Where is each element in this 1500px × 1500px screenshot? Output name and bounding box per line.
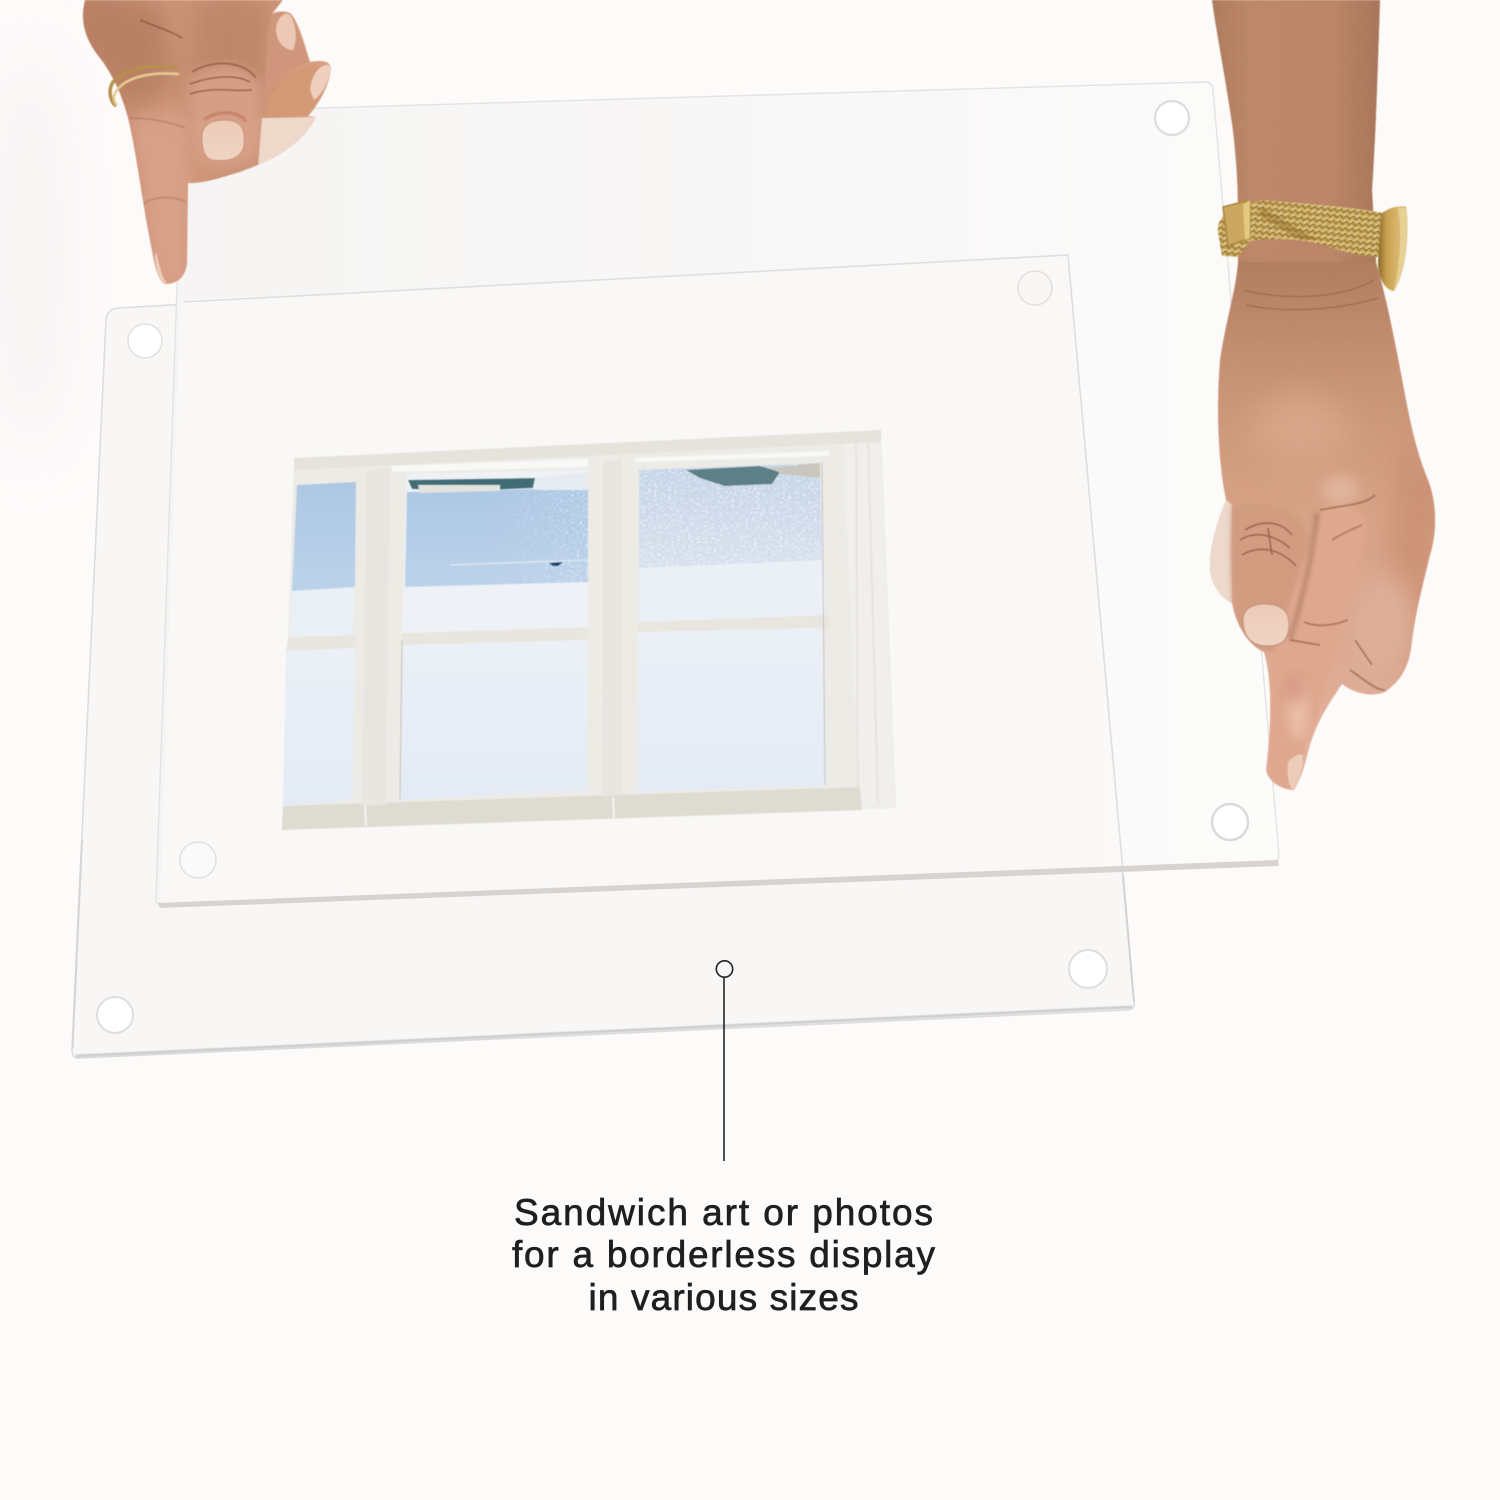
watch: gold mesh band xyxy=(1218,200,1407,291)
callout: marker and leader line xyxy=(716,961,733,1161)
pane: right bottom xyxy=(638,628,825,792)
panel holes: front xyxy=(180,101,1248,878)
thumb knuckle wrinkles xyxy=(1240,523,1296,566)
pane: right top xyxy=(639,463,825,622)
finger creases xyxy=(130,118,186,205)
mullions xyxy=(362,468,390,806)
sill xyxy=(282,787,862,830)
thumb xyxy=(1230,503,1310,651)
front panel bottom edge xyxy=(158,860,1279,908)
fingernails xyxy=(155,14,331,283)
shadow between thumb and finger xyxy=(1290,513,1317,640)
caption text: in various sizes xyxy=(588,1277,858,1318)
head rail xyxy=(294,430,881,470)
caption text: Sandwich art or photos xyxy=(514,1192,933,1233)
visible back panel top edge through front panel xyxy=(183,255,1123,872)
pane: centre bottom xyxy=(401,640,588,800)
hand: left, holding top edge xyxy=(70,0,340,290)
watch case xyxy=(1378,206,1407,291)
knuckle wrinkles on thumb xyxy=(140,20,256,94)
window frame xyxy=(282,430,896,830)
back of hand side shade xyxy=(1386,460,1436,670)
reddish cuticle xyxy=(204,113,246,122)
watch buckle xyxy=(1223,200,1250,246)
photo: window with sea view xyxy=(282,430,896,830)
hand: right, with wrist xyxy=(1200,0,1445,800)
creases xyxy=(1290,495,1385,690)
caption text: for a borderless display xyxy=(512,1234,936,1275)
infographic canvas xyxy=(71,0,1436,1311)
palm and index finger xyxy=(70,0,340,290)
soft shadow: upper left xyxy=(0,50,70,450)
thumb tip xyxy=(188,66,262,167)
knuckle highlight xyxy=(1260,396,1342,452)
inner highlight xyxy=(160,256,1125,902)
meeting rails xyxy=(286,615,829,651)
caption text xyxy=(512,1192,936,1318)
finger seen through acrylic xyxy=(1210,500,1232,603)
dark pane edge lines xyxy=(400,462,825,800)
right casing xyxy=(842,432,895,808)
gold ring xyxy=(110,67,178,105)
wrist creases xyxy=(1244,280,1378,310)
pane: centre top xyxy=(400,470,595,633)
acrylic panel: front, lifted xyxy=(156,82,1279,908)
finger through acrylic xyxy=(258,117,316,168)
arm and hand shape xyxy=(1200,0,1445,800)
thumbnail xyxy=(202,120,244,161)
index shading xyxy=(132,112,186,279)
index finger xyxy=(1266,554,1320,790)
panel holes: back xyxy=(97,324,1107,1033)
marker circle xyxy=(716,961,733,977)
index fingernail xyxy=(1288,754,1303,790)
shadow between digits xyxy=(186,40,188,260)
thumbnail xyxy=(1243,604,1289,646)
pale pocket above finger xyxy=(1322,476,1358,504)
pane: left top xyxy=(290,482,356,637)
acrylic panel: back xyxy=(72,255,1134,1058)
pane: left bottom xyxy=(283,648,355,805)
boat xyxy=(549,562,563,566)
leader line xyxy=(723,977,725,1161)
